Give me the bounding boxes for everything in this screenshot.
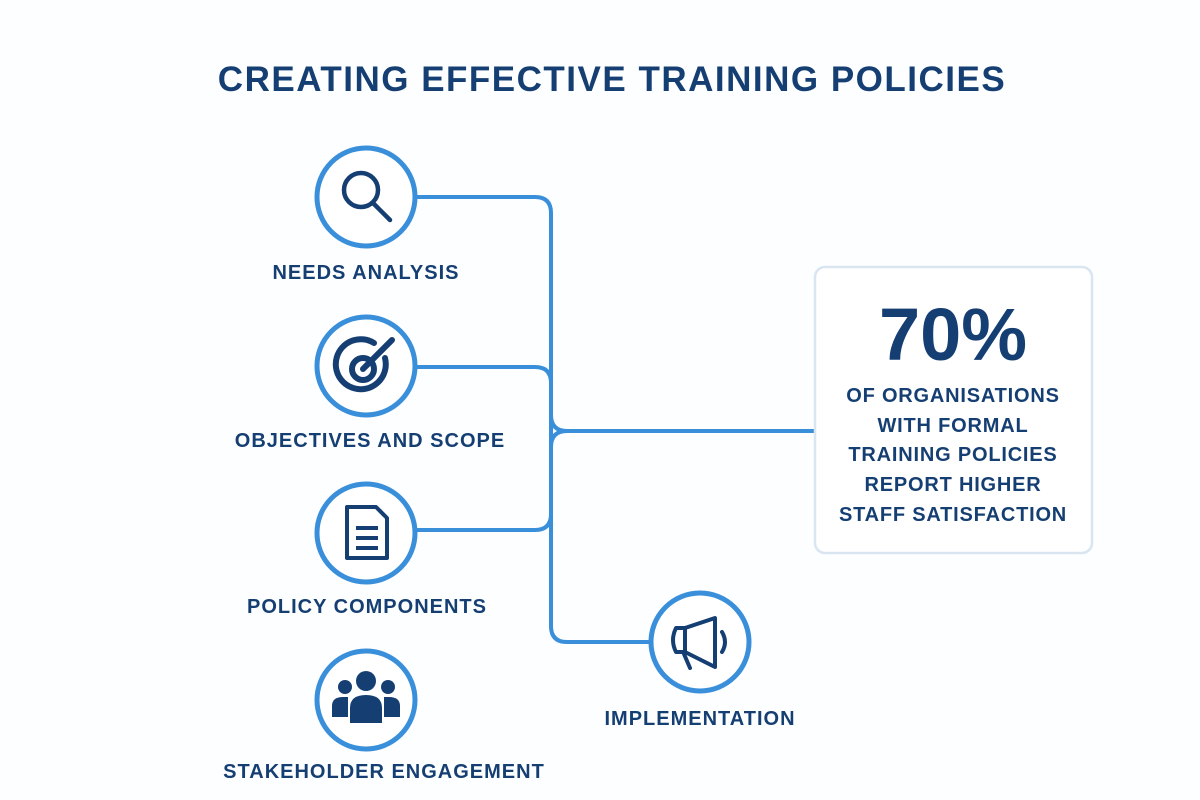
icon: megaphone xyxy=(673,618,725,668)
step: stakeholder engagement xyxy=(223,651,545,783)
stat callout: WITH FORMAL xyxy=(878,415,1028,437)
title: CREATING EFFECTIVE TRAINING POLICIES xyxy=(218,60,1006,99)
step: policy components xyxy=(247,484,487,618)
step: policy components: POLICY COMPONENTS xyxy=(247,596,487,618)
icon: document xyxy=(347,507,387,558)
icon: people xyxy=(332,671,400,723)
stat callout: OF ORGANISATIONS xyxy=(846,385,1060,407)
stat callout: STAFF SATISFACTION xyxy=(839,504,1067,526)
stat callout xyxy=(815,267,1092,553)
step: objectives and scope: OBJECTIVES AND SCOPE xyxy=(235,430,505,452)
stat callout: TRAINING POLICIES xyxy=(848,444,1058,466)
stat callout: REPORT HIGHER xyxy=(864,474,1042,496)
connector lines xyxy=(417,197,814,642)
stat callout: 70% xyxy=(879,293,1027,376)
step: objectives and scope xyxy=(235,317,505,452)
step: stakeholder engagement: STAKEHOLDER ENGAGEMENT xyxy=(223,761,545,783)
step: implementation: IMPLEMENTATION xyxy=(604,708,796,730)
step: implementation xyxy=(604,593,796,730)
step: needs analysis: NEEDS ANALYSIS xyxy=(272,262,460,284)
icon: magnifier xyxy=(344,173,390,220)
icon: target xyxy=(336,339,392,389)
step: needs analysis xyxy=(272,148,460,284)
